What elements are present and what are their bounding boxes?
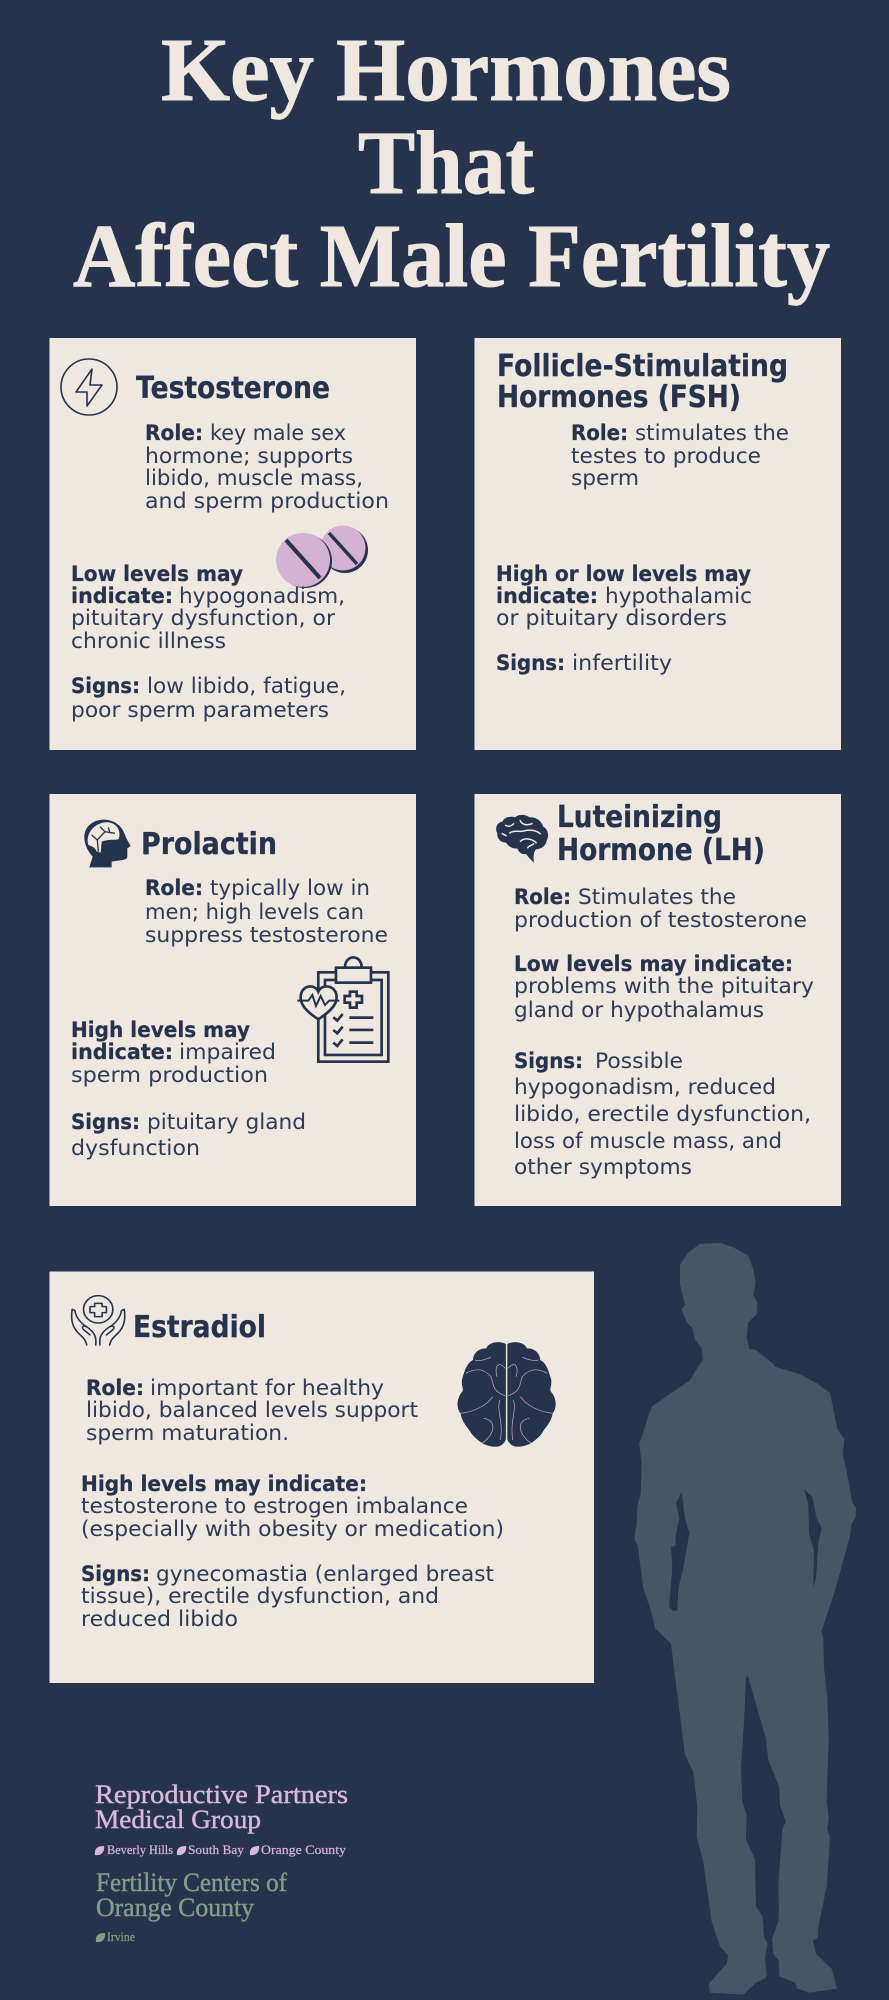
text: role: production of testosterone	[514, 908, 807, 932]
text: role: suppress testosterone	[145, 923, 388, 947]
logo: Reproductive Partners Medical Group: Reproductive Partners	[95, 1780, 348, 1809]
text: role: libido, balanced levels support	[86, 1398, 418, 1422]
text: role: Role:	[514, 885, 571, 909]
title: That	[358, 114, 534, 213]
text: signs	[71, 1110, 306, 1160]
logo: Fertility Centers of Orange County: Orange County	[96, 1893, 254, 1922]
text: role: testes to produce	[571, 444, 761, 468]
text: role: sperm	[571, 466, 639, 490]
text: signs: libido, erectile dysfunction,	[514, 1102, 811, 1126]
text: role: hormone; supports	[145, 444, 353, 468]
heading: LH: Luteinizing	[557, 800, 722, 835]
text: high levels	[81, 1472, 504, 1541]
text: high levels: High levels may indicate:	[81, 1472, 367, 1496]
text: high or low levels	[496, 562, 752, 630]
text: role: Role:	[145, 876, 203, 900]
icon: brain top view	[458, 1342, 556, 1447]
text: high or low levels: High or low levels may	[496, 562, 751, 586]
text: signs: dysfunction	[71, 1136, 200, 1160]
text: role	[145, 421, 389, 513]
logo: Reproductive Partners Medical Group: Beverly Hills	[107, 1842, 173, 1857]
title: Affect Male Fertility	[73, 207, 830, 306]
text: signs: Signs:	[514, 1049, 583, 1073]
text: low levels: gland or hypothalamus	[514, 998, 764, 1022]
text: role: typically low in	[210, 876, 370, 900]
text: signs: reduced libido	[81, 1607, 238, 1631]
text: signs: hypogonadism, reduced	[514, 1075, 776, 1099]
text: low levels: chronic illness	[71, 629, 226, 653]
text: high or low levels: indicate:	[496, 584, 598, 608]
text: low levels: hypogonadism,	[179, 584, 345, 608]
text: high levels: sperm production	[71, 1063, 268, 1087]
text: signs: Signs:	[71, 674, 140, 698]
text: signs	[514, 1049, 811, 1179]
text: signs: Signs:	[71, 1110, 140, 1134]
text: role: stimulates the	[635, 421, 789, 445]
text: signs: loss of muscle mass, and	[514, 1129, 782, 1153]
text: role: important for healthy	[150, 1376, 384, 1400]
text: low levels: pituitary dysfunction, or	[71, 606, 335, 630]
logo: Reproductive Partners Medical Group: South Bay	[188, 1842, 244, 1857]
text: low levels: indicate:	[71, 584, 173, 608]
logo: Reproductive Partners Medical Group: Medical Group	[95, 1805, 261, 1834]
text: role: Role:	[145, 421, 203, 445]
text: signs: infertility	[572, 651, 672, 675]
logo: Reproductive Partners Medical Group	[95, 1780, 348, 1857]
panel: prolactin	[50, 794, 416, 1206]
heading: FSH	[497, 349, 788, 415]
heading: prolactin: Prolactin	[141, 827, 277, 862]
text: signs	[71, 674, 346, 722]
text: high or low levels: or pituitary disorders	[496, 606, 727, 630]
heading: FSH: Hormones (FSH)	[497, 380, 741, 415]
panel: testosterone	[50, 338, 416, 750]
text: signs: Possible	[595, 1049, 683, 1073]
text: signs: gynecomastia (enlarged breast	[156, 1562, 494, 1586]
icon: side-view brain	[496, 815, 548, 863]
heading: estradiol: Estradiol	[133, 1310, 266, 1345]
text: low levels	[71, 562, 345, 653]
title	[73, 21, 830, 306]
logo: Fertility Centers of Orange County: Irvine	[107, 1929, 135, 1944]
text: signs	[81, 1562, 494, 1631]
heading: FSH: Follicle-Stimulating	[497, 349, 788, 384]
text: role: Role:	[571, 421, 628, 445]
panel: luteinizing hormone	[474, 794, 841, 1206]
icon: clipboard with heart	[297, 957, 388, 1062]
text: low levels: Low levels may	[71, 562, 243, 586]
text: signs: other symptoms	[514, 1155, 692, 1179]
text: signs: pituitary gland	[147, 1110, 306, 1134]
icon: hands holding medical cross	[72, 1296, 125, 1345]
title: Key Hormones	[161, 21, 731, 120]
text: role: and sperm production	[145, 489, 389, 513]
heading: testosterone: Testosterone	[136, 371, 330, 406]
text: signs: Signs:	[81, 1562, 150, 1586]
text: role	[514, 885, 807, 932]
silhouette of standing man	[634, 1243, 856, 1995]
text: low levels: problems with the pituitary	[514, 974, 814, 998]
text: low levels: Low levels may indicate:	[514, 952, 793, 976]
text: high levels: High levels may	[71, 1018, 250, 1042]
text: signs	[496, 651, 672, 675]
text: role: key male sex	[210, 421, 346, 445]
text: signs: low libido, fatigue,	[147, 674, 346, 698]
text: role: men; high levels can	[145, 900, 364, 924]
text: role: Role:	[86, 1376, 144, 1400]
text: role: Stimulates the	[578, 885, 736, 909]
text: high levels: testosterone to estrogen imbalance	[81, 1494, 468, 1518]
text: role	[86, 1376, 418, 1445]
text: low levels	[514, 952, 814, 1022]
text: high levels: impaired	[179, 1040, 276, 1064]
logo: Reproductive Partners Medical Group: Orange County	[261, 1842, 347, 1857]
icon: pills	[276, 526, 368, 588]
logo: Fertility Centers of Orange County	[96, 1868, 287, 1944]
panel: estradiol	[50, 1272, 594, 1683]
text: high levels: indicate:	[71, 1040, 173, 1064]
heading: LH: Hormone (LH)	[557, 833, 765, 868]
text: signs: poor sperm parameters	[71, 698, 329, 722]
text: high levels	[71, 1018, 276, 1087]
text: high levels: (especially with obesity or medication)	[81, 1517, 504, 1541]
panel: follicle-stimulating hormones	[474, 338, 841, 750]
text: high or low levels: hypothalamic	[605, 584, 752, 608]
text: role	[571, 421, 789, 490]
heading: LH	[557, 800, 765, 868]
logo: Fertility Centers of Orange County: Fertility Centers of	[96, 1868, 287, 1897]
text: signs: Signs:	[496, 651, 565, 675]
icon: lightning bolt in circle	[61, 359, 117, 415]
icon: head with brain	[84, 820, 131, 867]
text: role: libido, muscle mass,	[145, 466, 363, 490]
text: signs: tissue), erectile dysfunction, and	[81, 1584, 439, 1608]
text: role	[145, 876, 388, 947]
text: role: sperm maturation.	[86, 1421, 289, 1445]
